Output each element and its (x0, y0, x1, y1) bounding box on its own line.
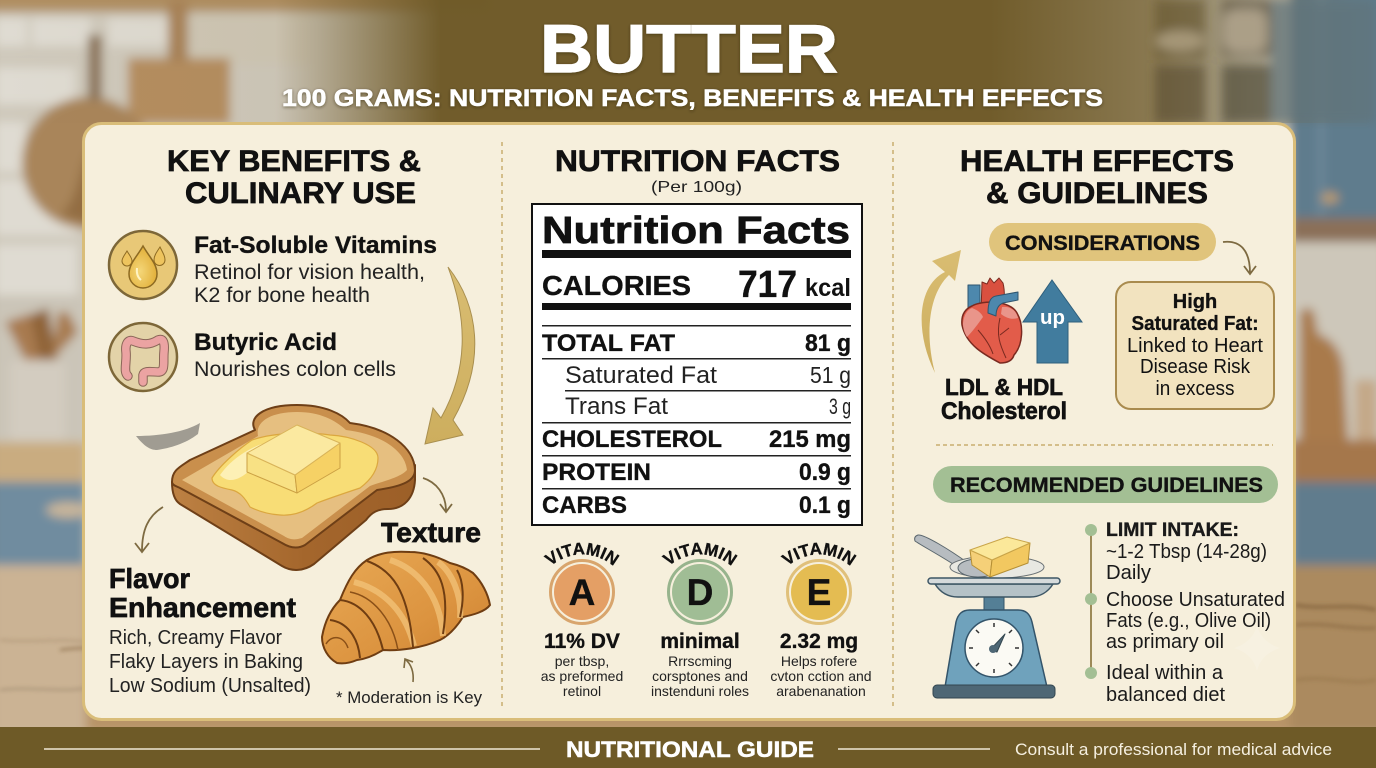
guidelines list: LIMIT INTAKE: (1106, 520, 1239, 541)
vitamin E badge: E (807, 572, 831, 613)
vitamin E badge: arabenanation (776, 683, 866, 699)
text: flavor enhancement: Low Sodium (Unsalted) (109, 675, 311, 697)
guidelines list: Fats (e.g., Olive Oil) (1106, 610, 1271, 632)
heading: nutrition facts: NUTRITION FACTS (555, 145, 840, 178)
benefit: butyric acid (194, 329, 396, 381)
footer bar: NUTRITIONAL GUIDE (566, 737, 814, 762)
note: moderation: * Moderation is Key (336, 688, 482, 707)
nutrition label table: 0.9 g (799, 459, 851, 486)
label: ldl and hdl cholesterol: Cholesterol (941, 398, 1067, 425)
heading: key benefits: CULINARY USE (185, 177, 416, 210)
heading: key benefits: KEY BENEFITS & (167, 145, 421, 178)
header title block (282, 11, 1103, 112)
text: flavor enhancement: Flaky Layers in Baking (109, 651, 303, 673)
guidelines list: Daily (1106, 562, 1151, 584)
arrow: up indicator: up (1040, 307, 1065, 329)
pill: recommended guidelines: RECOMMENDED GUIDELINES (950, 474, 1263, 497)
vitamin A badge: VITAMIN (544, 542, 620, 566)
nutrition label table: CALORIES (542, 270, 691, 301)
sparkle decoration (1234, 625, 1280, 671)
nutrition label table: PROTEIN (542, 459, 651, 486)
heading: key benefits (167, 145, 421, 210)
nutrition label table: CARBS (542, 492, 627, 519)
vitamin D badge: Rrrscming (668, 653, 732, 669)
nutrition label table: kcal (805, 274, 851, 302)
nutrition label table: 717 (738, 264, 797, 306)
guidelines list (1085, 520, 1285, 706)
illustration: croissant (322, 552, 490, 663)
vitamin A badge: 11% DV (544, 630, 620, 653)
guidelines list: Choose Unsaturated (1106, 589, 1285, 611)
vitamin E badge: 2.32 mg (780, 630, 858, 653)
text: flavor enhancement: Enhancement (109, 592, 296, 623)
text: flavor enhancement: Flavor (109, 563, 190, 594)
vitamin D badge: VITAMIN (662, 542, 738, 566)
callout: high saturated fat: in excess (1156, 378, 1234, 400)
heading: health effects (960, 145, 1234, 210)
icon: knife (136, 423, 200, 450)
main cream panel (84, 124, 1294, 720)
icon: colon (109, 323, 177, 391)
benefit: fat-soluble vitamins: Fat-Soluble Vitamins (194, 232, 437, 259)
arrow: large gold curve to toast (425, 267, 475, 444)
callout: high saturated fat: Disease Risk (1140, 356, 1251, 378)
nutrition label table: CHOLESTEROL (542, 426, 722, 453)
nutrition label table: Saturated Fat (565, 362, 717, 389)
arrow: toast to flavor (135, 507, 163, 552)
benefit: fat-soluble vitamins: K2 for bone health (194, 284, 370, 307)
vitamin E badge: Helps rofere (781, 653, 857, 669)
nutrition label table: 3 g (829, 394, 851, 419)
guidelines list: ~1-2 Tbsp (14-28g) (1106, 541, 1267, 563)
vitamin D badge: corsptones and (652, 668, 748, 684)
nutrition label table: 215 mg (769, 426, 851, 453)
benefit: butyric acid: Butyric Acid (194, 329, 337, 356)
heading: health effects: & GUIDELINES (986, 177, 1208, 210)
label: texture: Texture (381, 517, 481, 548)
guidelines list: balanced diet (1106, 684, 1225, 706)
nutrition label table (532, 204, 862, 525)
pill: recommended guidelines (933, 466, 1278, 503)
text: flavor enhancement: Rich, Creamy Flavor (109, 627, 282, 649)
nutrition label table: 51 g (810, 362, 851, 388)
nutrition label table: Nutrition Facts (542, 210, 850, 252)
arrow: considerations to box (1223, 242, 1256, 274)
heading: nutrition facts (555, 145, 840, 196)
panel: key benefits and culinary use (109, 145, 490, 707)
heading: nutrition facts: (Per 100g) (651, 179, 742, 196)
guidelines list: as primary oil (1106, 631, 1224, 653)
illustration: toast with butter (172, 405, 415, 570)
vitamin A badge: retinol (563, 683, 601, 699)
callout: high saturated fat (1116, 282, 1274, 409)
icon: oil drops (109, 231, 177, 299)
benefit: butyric acid: Nourishes colon cells (194, 358, 396, 381)
icon: kitchen scale with butter (915, 535, 1060, 698)
nutrition label table: Trans Fat (565, 393, 668, 420)
arrow: gold curve to considerations (922, 250, 961, 373)
nutrition label table: TOTAL FAT (542, 330, 675, 357)
arrow: up indicator (1023, 280, 1082, 363)
vitamin D badge: minimal (660, 630, 740, 653)
panel: health effects and guidelines (915, 145, 1285, 706)
vitamin A badge (541, 542, 623, 699)
footer bar (0, 727, 1376, 768)
vitamin E badge: cvton cction and (770, 668, 872, 684)
callout: high saturated fat: High (1173, 291, 1217, 313)
label: ldl and hdl cholesterol (941, 374, 1067, 425)
centre wood behind panel (86, 565, 1290, 735)
vitamin A badge: as preformed (541, 668, 623, 684)
callout: high saturated fat: Saturated Fat: (1132, 313, 1258, 335)
vitamin E badge (770, 542, 872, 699)
icon: heart (962, 278, 1022, 363)
vitamin A badge: per tbsp, (555, 653, 609, 669)
nutrition label table: 81 g (805, 330, 851, 357)
arrow: moderation to croissant (404, 659, 413, 682)
pill: considerations (989, 223, 1216, 261)
label: ldl and hdl cholesterol: LDL & HDL (945, 374, 1063, 400)
right side (1290, 0, 1376, 220)
vitamin D badge (651, 542, 749, 699)
subtitle: 100 GRAMS: NUTRITION FACTS, BENEFITS & HEALTH EFFECTS (282, 85, 1103, 112)
benefit: fat-soluble vitamins (194, 232, 437, 307)
benefit: fat-soluble vitamins: Retinol for vision health, (194, 261, 425, 284)
text: flavor enhancement (109, 563, 311, 697)
pill: considerations: CONSIDERATIONS (1005, 232, 1200, 255)
vitamin E badge: VITAMIN (780, 542, 857, 566)
footer bar: Consult a professional for medical advice (1015, 740, 1332, 759)
heading: health effects: HEALTH EFFECTS (960, 145, 1234, 178)
vitamin D badge: instenduni roles (651, 683, 749, 699)
arrow: toast to texture (423, 478, 452, 512)
vitamin D badge: D (687, 572, 713, 613)
panel: nutrition facts (531, 145, 872, 699)
nutrition label table: 0.1 g (799, 492, 851, 519)
guidelines list: Ideal within a (1106, 662, 1224, 684)
callout: high saturated fat: Linked to Heart (1127, 335, 1263, 357)
vitamin A badge: A (569, 572, 595, 613)
title: BUTTER (540, 11, 838, 87)
